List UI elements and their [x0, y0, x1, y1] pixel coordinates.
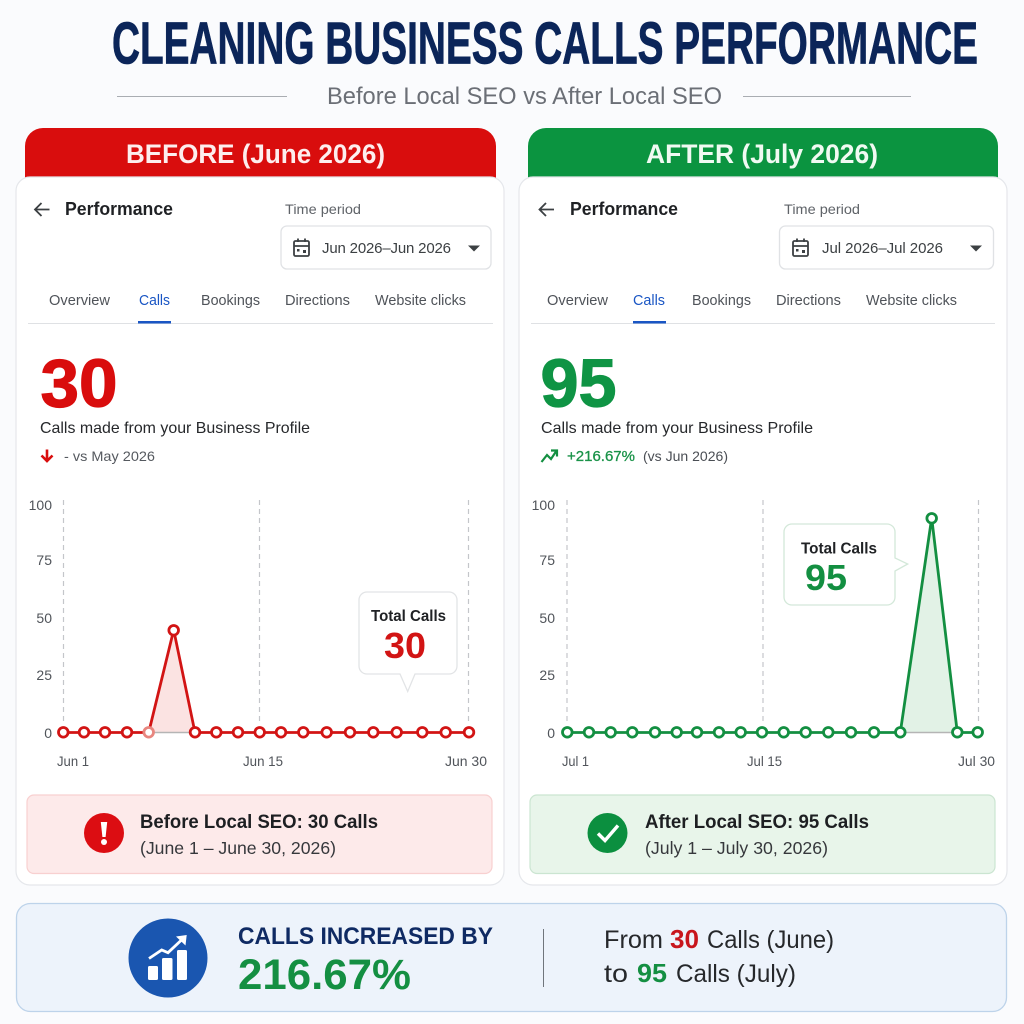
time period label: Time period: [784, 201, 860, 217]
date dropdown: Jul 2026–Jul 2026: [822, 240, 943, 257]
callout: total calls 95: 95: [805, 557, 847, 598]
status box: after: After Local SEO: 95 Calls: [645, 812, 869, 833]
time period label: Time period: [285, 201, 361, 217]
before card: [16, 177, 504, 885]
comparison row: [542, 448, 728, 465]
callout: total calls 30: Total Calls: [371, 608, 446, 625]
from june text: From: [604, 926, 663, 954]
panel: before: [16, 128, 504, 885]
tabs: [531, 293, 995, 324]
status box: before: Before Local SEO: 30 Calls: [140, 812, 378, 833]
line chart: July calls: 50: [539, 610, 555, 626]
callout: total calls 95: [784, 524, 908, 605]
performance heading: Performance: [570, 199, 678, 219]
status box: before: [27, 795, 492, 874]
after header banner: [528, 128, 998, 185]
to july text: 95: [637, 958, 667, 988]
line chart: July calls: Jul 30: [958, 753, 995, 769]
to july text: [604, 958, 796, 988]
icon: alert: [84, 813, 124, 853]
tabs: Website clicks: [866, 293, 957, 309]
line chart: June calls: 100: [29, 497, 52, 513]
before header banner: [25, 128, 496, 185]
tabs: Calls: [139, 293, 170, 309]
line chart: July calls: Jul 15: [747, 753, 782, 769]
tabs: Overview: [547, 293, 609, 309]
comparison row: (vs Jun 2026): [643, 448, 728, 464]
callout: total calls 30: [359, 592, 457, 692]
status box: after: [530, 795, 995, 874]
status box: after: (July 1 – July 30, 2026): [645, 838, 828, 858]
from june text: 30: [670, 924, 699, 954]
from june text: [604, 924, 834, 954]
date dropdown: [780, 226, 994, 269]
after card: [519, 177, 1007, 885]
after heading: AFTER (July 2026): [646, 139, 878, 169]
callout: total calls 95: Total Calls: [801, 540, 877, 558]
summary percentage: 216.67%: [238, 951, 411, 999]
line chart: June calls: [29, 497, 487, 769]
metric caption: Calls made from your Business Profile: [40, 420, 310, 437]
date dropdown: [281, 226, 491, 269]
icon: back arrow: [540, 203, 554, 216]
tabs: Bookings: [692, 293, 751, 309]
line chart: July calls: 25: [539, 667, 555, 683]
icon: growth chart: [128, 918, 208, 998]
before heading: BEFORE (June 2026): [126, 139, 385, 169]
line chart: June calls: Jun 1: [57, 753, 89, 769]
performance heading: Performance: [65, 199, 173, 219]
date dropdown: Jun 2026–Jun 2026: [322, 240, 451, 257]
panel: after: [519, 128, 1007, 885]
tabs: Overview: [49, 293, 111, 309]
line chart: June calls: 25: [36, 667, 52, 683]
big number 95: 95: [540, 346, 616, 422]
line chart: July calls: Jul 1: [562, 753, 589, 769]
big number 30: 30: [40, 346, 118, 422]
summary label: CALLS INCREASED BY: [238, 923, 493, 950]
line chart: June calls: 75: [36, 552, 52, 568]
line chart: July calls: [532, 497, 995, 769]
icon: check: [588, 813, 628, 853]
comparison row: - vs May 2026: [64, 448, 155, 464]
tabs: [28, 293, 493, 324]
tabs: Calls: [633, 293, 665, 309]
line chart: June calls: Jun 15: [243, 753, 283, 769]
tabs: Directions: [776, 293, 841, 309]
comparison row: +216.67%: [567, 449, 635, 465]
panel: summary: [16, 904, 1006, 1012]
line chart: July calls: 75: [539, 552, 555, 568]
from june text: Calls (June): [707, 926, 834, 954]
tabs: Bookings: [201, 293, 260, 309]
tabs: Website clicks: [375, 293, 466, 309]
icon: back arrow: [35, 203, 50, 216]
callout: total calls 30: 30: [384, 625, 426, 666]
line chart: June calls: Jun 30: [445, 753, 487, 769]
line chart: June calls: 50: [36, 610, 52, 626]
to july text: Calls (July): [676, 960, 796, 988]
status box: before: (June 1 – June 30, 2026): [140, 838, 336, 858]
metric caption: Calls made from your Business Profile: [541, 420, 813, 437]
tabs: Directions: [285, 293, 350, 309]
line chart: July calls: 100: [532, 497, 555, 513]
subtitle: Before Local SEO vs After Local SEO: [327, 83, 722, 110]
to july text: to: [604, 960, 628, 988]
line chart: July calls: 0: [547, 725, 555, 741]
line chart: June calls: 0: [44, 725, 52, 741]
